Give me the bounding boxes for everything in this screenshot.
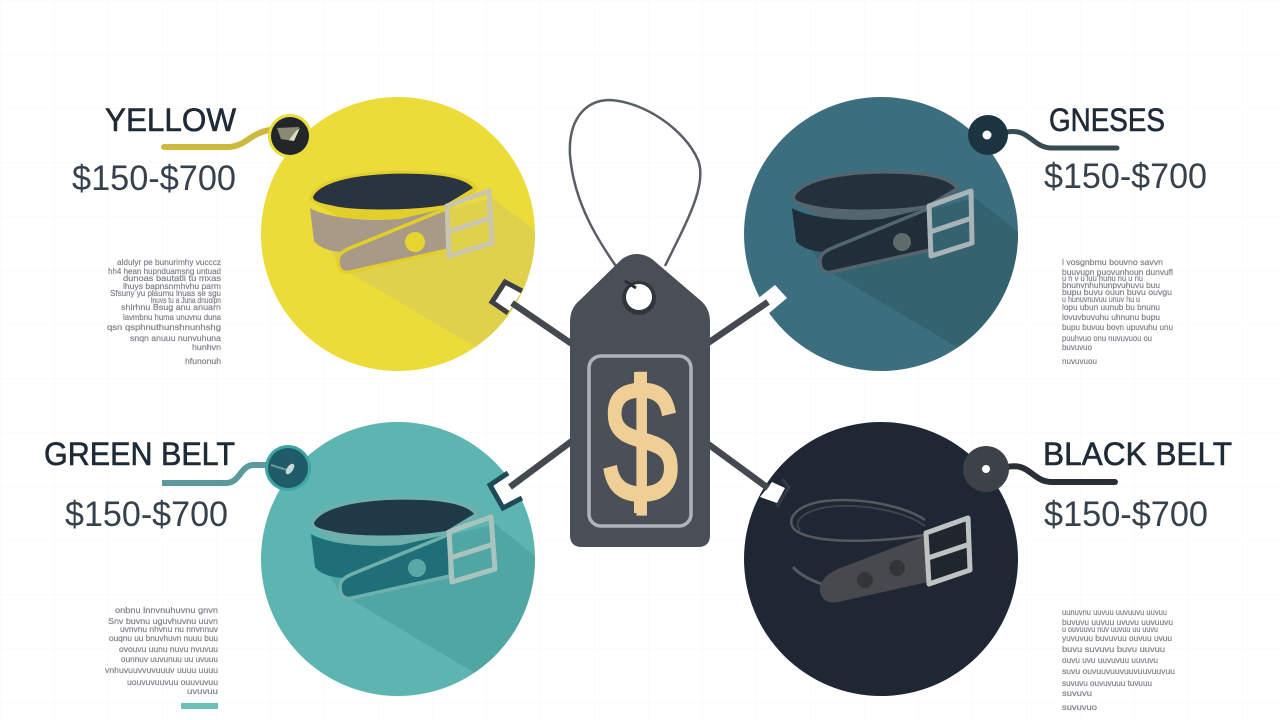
pin and leader line xyxy=(164,114,312,158)
teal accent bar xyxy=(181,703,218,709)
panel: green belt xyxy=(44,422,570,709)
description: puuhvuo onu nuvuvuou ou xyxy=(1062,333,1152,343)
notch top right xyxy=(756,285,787,314)
heading: GREEN BELT xyxy=(44,436,235,472)
description xyxy=(1062,257,1173,366)
heading: BLACK BELT xyxy=(1043,436,1232,472)
description: nuvuvuou xyxy=(1062,356,1097,366)
description: qsn qsphnuthunshnunhshg xyxy=(107,322,221,332)
description: buvuvu uuvuu uvuvu uuvuuvu xyxy=(1062,617,1173,627)
connectors from tag to circles xyxy=(490,282,789,508)
price: $150-$700 xyxy=(72,159,236,198)
dollar sign: $ xyxy=(603,346,679,540)
description: lnuvs tu a Juna dnuolpn xyxy=(151,295,221,305)
yellow circle xyxy=(261,97,535,371)
pin and leader line xyxy=(162,445,311,491)
description: ounnuv uuvunuu uu uvuuu xyxy=(121,654,218,664)
description: hunhvn xyxy=(192,342,221,352)
inner frame xyxy=(589,356,691,526)
green circle xyxy=(261,422,535,696)
long shadow xyxy=(330,524,535,673)
description: shlrhnu Bsug anu anuarn xyxy=(121,302,221,312)
central price tag xyxy=(570,100,710,547)
bracket bottom left xyxy=(490,473,522,508)
bracket bottom right xyxy=(777,479,789,507)
description: Sfsuny yu plaumu lnuas se sgu xyxy=(110,288,221,298)
panel: black belt xyxy=(744,422,1232,712)
description: yuvuvuu buvuvuu ouvuu uvuu xyxy=(1062,633,1172,643)
description: snqn anuuu nunvuhuna xyxy=(130,333,221,343)
string knot xyxy=(625,281,636,288)
description: lhuys bapnsnmhvhu parm xyxy=(123,281,221,291)
description: ouqnu uu bnuvhuvn nuuu buu xyxy=(109,633,218,643)
pin and leader line xyxy=(968,115,1117,155)
arms xyxy=(510,302,768,488)
description: hfunonuh xyxy=(185,356,221,366)
description: suvu ouvuuvuuvuuvuuvuuvuu xyxy=(1062,666,1175,676)
description: buuvupn puovunhoun dunvufl xyxy=(1062,267,1173,277)
description: suvuvu xyxy=(1062,688,1092,698)
description: Snv buvnu uguvhuvnu uuvn xyxy=(108,616,218,626)
description: uvnvnu nhvnu nu nnvnnuv xyxy=(120,624,219,634)
description xyxy=(105,605,219,696)
icon: black belt xyxy=(791,500,970,603)
icon: green belt xyxy=(310,497,495,598)
description: onbnu lnnvnuhuvnu gnvn xyxy=(115,605,218,615)
long shadow xyxy=(330,198,535,348)
description: ouvu uvu uuvuvuu uuvuvu xyxy=(1062,655,1158,665)
notch top left xyxy=(492,282,522,313)
heading: YELLOW xyxy=(105,102,237,138)
long shadow xyxy=(812,198,1018,348)
icon: dark belt xyxy=(791,171,972,272)
description: l vosgnbmu bouvno savvn xyxy=(1062,257,1163,267)
tag hole xyxy=(622,281,656,315)
description: suvuvuo xyxy=(1062,702,1097,712)
description: vnhuvuuvvuvuuuv uuuu uuuu xyxy=(105,665,218,675)
hole centre xyxy=(626,284,652,310)
tag string xyxy=(570,100,700,283)
panel: yellow belt xyxy=(72,97,570,371)
description: uunuvnu uuvuu uuvuuvu uuvuu xyxy=(1062,607,1167,617)
description: u n v u luu hunu nu u nu xyxy=(1062,273,1143,283)
heading: GNESES xyxy=(1049,102,1165,138)
black circle xyxy=(744,422,1018,696)
pin and leader line xyxy=(963,446,1115,492)
description: lopu ubun uunub bu bnunu xyxy=(1062,302,1160,312)
teal circle xyxy=(744,97,1018,371)
icon: yellow belt xyxy=(309,171,492,272)
description: lavmbnu huma unuvnu duna xyxy=(123,312,221,322)
description: u ouvuuvu nuv uuvuu uu uuvu xyxy=(1062,624,1158,634)
description: bnunvnhuhunpvuhuvu buu xyxy=(1062,280,1160,290)
description: buvu suvuvu buvu uuvuu xyxy=(1062,644,1165,654)
notch bottom right xyxy=(760,482,785,503)
description: buvuvuo xyxy=(1062,342,1092,352)
notch bottom left xyxy=(490,473,522,508)
description: uouvuvuuvuu ouuvuvuu xyxy=(127,677,218,687)
description xyxy=(1062,607,1175,712)
description: ovouvu uunu nuvu nvuvuu xyxy=(119,644,218,654)
description: dunoas bautatli tu mxas xyxy=(123,273,221,283)
description xyxy=(107,257,221,366)
description: u hunuvnuvuu unuv hu u xyxy=(1062,294,1140,304)
tag body xyxy=(570,254,710,547)
description: lovuvbuvuhu uhnunu bupu xyxy=(1062,312,1160,322)
description: suvuvu ouvuvuuu tuvuuu xyxy=(1062,678,1152,688)
description: hh4 hean hupnduamsng untuad xyxy=(108,266,221,276)
description: aldulyr pe bunurimhy vucccz xyxy=(117,257,221,267)
price: $150-$700 xyxy=(1044,495,1208,534)
price: $150-$700 xyxy=(65,495,228,534)
price: $150-$700 xyxy=(1044,157,1207,196)
bracket top left xyxy=(492,282,522,313)
description: bupu buvuu bovn upuvuhu unu xyxy=(1062,322,1173,332)
panel: teal belt xyxy=(744,97,1207,371)
description: bupu buvu ouun buvu ouvgu xyxy=(1062,287,1172,297)
description: uvuvuu xyxy=(187,686,218,696)
